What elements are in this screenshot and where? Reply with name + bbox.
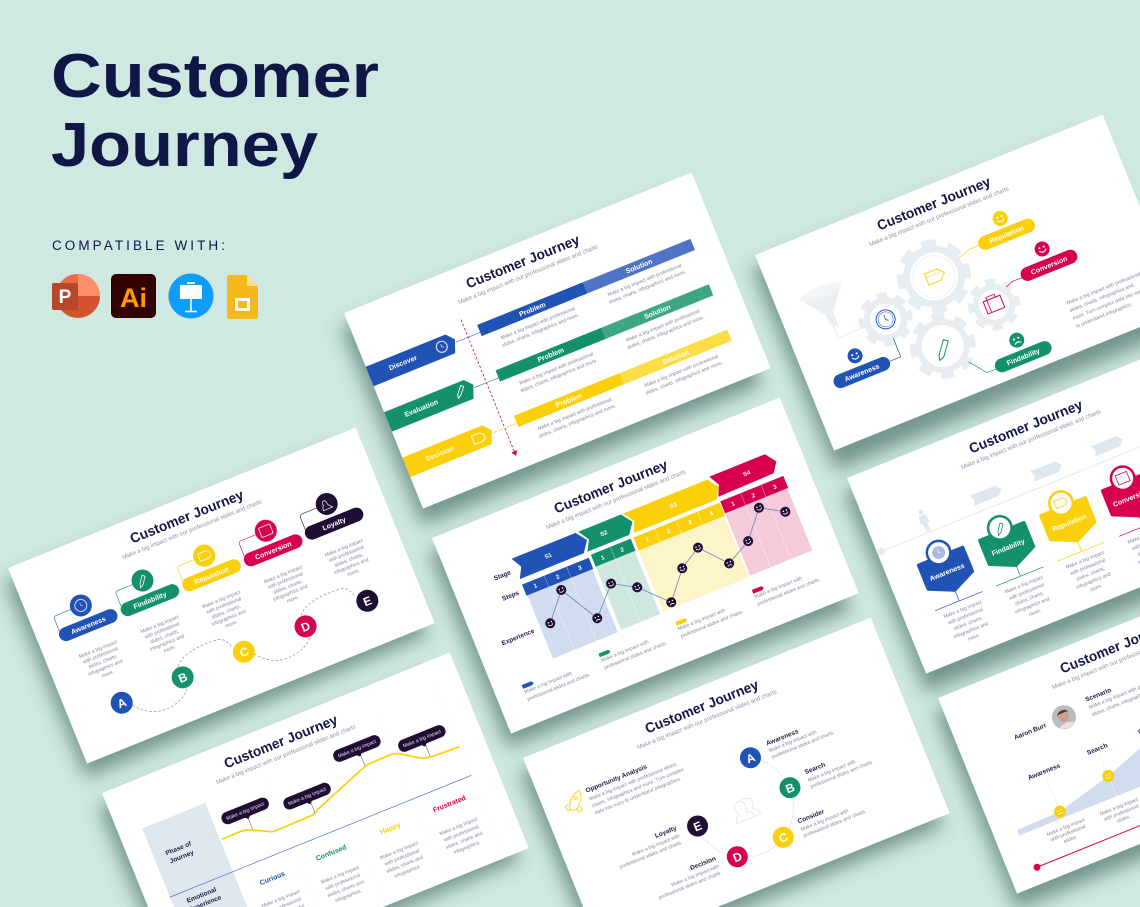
stage descriptions: slides. xyxy=(1063,834,1078,845)
column: Frustrated: Frustrated xyxy=(432,795,467,814)
stage labels and markers xyxy=(1027,719,1140,824)
panel: gears slide xyxy=(755,115,1140,451)
panel: emotional curve slide xyxy=(102,653,529,907)
slide heading: Customer Journey xyxy=(464,231,582,291)
node B: B xyxy=(783,780,797,796)
pill: Conversion xyxy=(1012,231,1079,283)
step: Loyalty: Loyalty xyxy=(322,517,347,532)
title: Customer xyxy=(51,42,379,111)
step: Awareness: Awareness xyxy=(70,616,107,636)
column: Frustrated xyxy=(430,794,488,858)
column: Confused: infographics. xyxy=(334,888,363,904)
step: Loyalty: slides, charts, xyxy=(334,552,364,569)
column: Frustrated: slides, charts and xyxy=(445,831,484,851)
step: Awareness: more. xyxy=(101,669,115,679)
node D: professional slides and charts. xyxy=(658,870,723,901)
stage S4: 1 xyxy=(731,501,737,508)
slide heading: Make a big impact with our professional slides and charts xyxy=(216,724,357,786)
pin: Findability: more. xyxy=(1028,608,1042,618)
legend: Make a big impact with xyxy=(600,639,650,664)
row: Decision: Problem xyxy=(555,392,584,409)
step: Loyalty: Make a big impact xyxy=(324,538,365,559)
step: Awareness xyxy=(48,584,138,689)
column: Curious: Curious xyxy=(259,871,286,887)
row: Discover: slides, charts, infographics and more. xyxy=(608,269,687,306)
icon: Illustrator xyxy=(111,274,156,318)
stage S1 xyxy=(512,530,598,596)
persona name: Aaron Burr xyxy=(1013,722,1048,742)
line chart: experience xyxy=(533,493,807,654)
pill: Reputation xyxy=(970,200,1037,252)
column: Confused: with professional xyxy=(325,872,361,892)
node D xyxy=(652,843,752,901)
title: Journey xyxy=(51,111,319,180)
row: Discover: Make a big impact with professional xyxy=(500,306,576,341)
title xyxy=(51,42,379,180)
row: Evaluation xyxy=(384,281,721,445)
column: Confused: slides, charts and xyxy=(327,879,365,899)
dashed journey path xyxy=(121,584,368,720)
pill: Awareness: Awareness xyxy=(844,363,881,384)
pin: Awareness: Make a big impact xyxy=(943,599,983,620)
pin: Reputation: Reputation xyxy=(1051,513,1088,533)
step: Conversion: with professional xyxy=(267,571,304,591)
step: Reputation: infographics and xyxy=(211,608,247,628)
slide heading: Customer Journey xyxy=(875,173,993,233)
row labels: Stage xyxy=(493,569,512,582)
step: Awareness: with professional xyxy=(82,646,119,665)
row: Discover xyxy=(366,236,702,399)
stage S3: 3 xyxy=(688,520,694,527)
pin: Awareness: with professional xyxy=(947,607,984,626)
pin: Findability xyxy=(972,506,1060,625)
stage descriptions: with professional xyxy=(1103,803,1140,823)
node A: Awareness xyxy=(765,728,800,747)
milestones A to E: B xyxy=(176,670,190,686)
step: Awareness: Make a big impact xyxy=(78,639,119,660)
step: Findability xyxy=(109,559,200,664)
pill: Reputation: Reputation xyxy=(989,225,1025,245)
step: Loyalty: infographics and xyxy=(333,557,370,576)
node B: Make a big impact with xyxy=(807,759,857,784)
stage labels and markers: Search xyxy=(1086,742,1109,757)
opportunity analysis: Make a big impact with professional slides, xyxy=(588,761,678,802)
stage S1: 1 xyxy=(533,583,539,590)
panel: circular stages slide xyxy=(523,618,950,907)
row: Evaluation: Solution xyxy=(643,304,672,321)
stage S4: 2 xyxy=(751,493,757,500)
row: Evaluation: Problem xyxy=(537,347,565,364)
legend: professional slides and charts. xyxy=(757,577,821,608)
step: Reputation: Make a big impact xyxy=(202,589,242,610)
label column: Journey xyxy=(169,849,195,865)
stage descriptions: with professional xyxy=(1050,824,1087,843)
pin: Awareness: infographics and xyxy=(953,621,990,640)
ring xyxy=(681,748,809,872)
area chart xyxy=(990,632,1140,836)
stage S1: 2 xyxy=(555,574,561,581)
stage S2: 2 xyxy=(620,547,626,554)
step: Findability: slides, charts, xyxy=(149,628,180,646)
stage S3: 4 xyxy=(709,511,715,518)
step: Reputation xyxy=(171,534,261,639)
road line xyxy=(876,409,1140,557)
pin: Reputation: Make a big impact xyxy=(1065,550,1106,571)
slide heading: Customer Journey xyxy=(643,676,761,736)
node B xyxy=(776,744,874,801)
node E: E xyxy=(691,818,704,834)
step: Awareness: slides, charts, xyxy=(88,653,118,670)
scenario: Scenario xyxy=(1084,687,1112,704)
row: Discover: Discover xyxy=(388,355,419,372)
row: Decision: slides, charts, infographics and more. xyxy=(538,403,617,440)
icon: rocket xyxy=(562,790,587,816)
legend: Make a big impact with xyxy=(677,608,727,632)
node E: Loyalty xyxy=(654,825,678,840)
icon: Illustrator: Ai xyxy=(120,283,147,313)
step: Findability: Findability xyxy=(133,591,168,611)
milestones A to E xyxy=(106,586,383,717)
pin: Findability: Make a big impact xyxy=(1004,574,1044,595)
node D: Decision xyxy=(689,855,717,872)
row: Discover: Make a big impact with professional xyxy=(607,263,683,298)
row: Decision: Solution xyxy=(662,349,690,366)
column: Happy: with professional xyxy=(384,848,421,868)
stage labels and markers: Awareness xyxy=(1027,762,1062,782)
text block: slides, charts, infographics and xyxy=(1069,283,1135,314)
opportunity analysis xyxy=(585,751,688,816)
pin: Reputation: slides, charts, xyxy=(1075,566,1106,583)
milestones A to E: C xyxy=(237,644,251,660)
gear: pencil xyxy=(904,308,981,384)
stage S2 xyxy=(578,512,643,568)
scenario xyxy=(1084,666,1140,718)
column: Frustrated: Make a big impact xyxy=(439,816,479,837)
pin: Findability: Findability xyxy=(991,538,1026,558)
node C xyxy=(769,794,868,851)
row: Discover: Problem xyxy=(518,302,547,319)
step: Conversion: slides, charts, xyxy=(273,579,303,596)
row: Evaluation: slides, charts, infographics and more. xyxy=(626,315,705,351)
step: Conversion: infographics and xyxy=(272,584,309,603)
row: Evaluation: Make a big impact with professional xyxy=(519,351,594,387)
step: Conversion: Make a big impact xyxy=(263,564,304,585)
step: Reputation: Reputation xyxy=(194,566,230,586)
slide heading: Customer Journey xyxy=(967,396,1085,456)
column: Confused: Make a big impact xyxy=(320,865,361,886)
step: Reputation: more. xyxy=(224,619,238,630)
pin: Awareness: more. xyxy=(967,632,981,643)
opportunity analysis: Opportunity Analysis xyxy=(585,763,648,795)
step: Conversion: Conversion xyxy=(254,541,293,562)
text block: Make a big impact with professional xyxy=(1066,271,1140,306)
legend: professional slides and charts. xyxy=(603,640,668,671)
node E: Make a big impact with xyxy=(631,833,681,858)
label column: Emotional xyxy=(186,886,218,905)
column: Confused xyxy=(311,842,369,907)
connector lines xyxy=(862,235,1050,405)
slide heading: Make a big impact with our professional slides and charts xyxy=(546,469,687,531)
icon: Keynote xyxy=(168,274,214,318)
pill: Findability: Findability xyxy=(1006,348,1041,367)
persona photo xyxy=(1048,702,1080,733)
row: Decision: Decision xyxy=(425,446,455,463)
slide heading: Customer Journey xyxy=(552,456,670,516)
slide heading: Make a big impact with our professional slides and charts xyxy=(869,186,1010,248)
column: Happy: Happy xyxy=(379,822,402,836)
row: Evaluation: slides, charts, infographics and more. xyxy=(520,358,599,394)
row: Evaluation: Make a big impact with professional xyxy=(625,308,701,344)
pin: Awareness: Awareness xyxy=(929,563,966,583)
light arrows xyxy=(969,434,1125,506)
node A: professional slides and charts. xyxy=(771,730,836,760)
stage descriptions xyxy=(1046,796,1140,851)
stage S3: S3 xyxy=(669,502,679,510)
legend xyxy=(521,565,822,703)
legend: professional slides and charts. xyxy=(527,672,591,703)
slide heading: Make a big impact with our professional slides and charts xyxy=(961,409,1102,471)
step: Conversion: more. xyxy=(286,594,300,605)
step: Loyalty: more. xyxy=(347,568,361,578)
node E xyxy=(612,812,712,870)
node C: professional slides and charts. xyxy=(803,809,867,839)
callouts: Make a big impact xyxy=(337,739,378,760)
legend: Make a big impact with xyxy=(754,576,803,600)
slide heading: Customer Journey xyxy=(222,711,340,771)
step: Loyalty xyxy=(293,482,384,587)
node D: Make a big impact with xyxy=(671,864,720,888)
row: Decision xyxy=(402,327,739,490)
icon: people xyxy=(730,795,761,824)
stage S1: S1 xyxy=(544,552,554,561)
label column xyxy=(142,803,266,907)
row: Evaluation: Evaluation xyxy=(404,399,439,419)
pin: Awareness: slides, charts, xyxy=(953,615,984,632)
yellow curve xyxy=(216,729,463,851)
stage S4: S4 xyxy=(743,470,752,478)
opportunity analysis: data into easy to understand infographics. xyxy=(594,776,682,816)
pin: Reputation: with professional xyxy=(1070,557,1106,577)
opportunity analysis: charts, infographics and more. Turn complex xyxy=(591,767,685,809)
row labels: Experience xyxy=(501,628,536,647)
legend: professional slides and charts. xyxy=(680,609,745,640)
stage S4: 3 xyxy=(773,484,778,491)
callouts: Make a big impact xyxy=(225,801,266,822)
milestones A to E: E xyxy=(361,593,374,609)
stage columns xyxy=(527,488,813,658)
panel: scenario slide xyxy=(938,558,1140,894)
step: Findability: with professional xyxy=(144,621,181,641)
node C: Make a big impact with xyxy=(800,808,850,833)
milestones A to E: A xyxy=(115,695,129,711)
slide heading: Make a big impact with our professional slides and charts xyxy=(637,689,778,751)
row: Decision: Make a big impact with professional xyxy=(644,354,719,389)
row labels: Steps xyxy=(501,590,521,603)
node A: Make a big impact with xyxy=(768,729,818,754)
gear: briefcase xyxy=(964,275,1024,335)
step: Findability: Make a big impact xyxy=(140,614,180,635)
icon: funnel xyxy=(798,277,862,346)
stage S3: 2 xyxy=(666,528,672,535)
panel: timeline slide xyxy=(8,428,435,764)
arrow: dashed timeline xyxy=(458,319,519,457)
column: Frustrated: with professional xyxy=(443,824,480,844)
compatible with label: COMPATIBLE WITH: xyxy=(52,238,225,253)
panel: pins slide xyxy=(847,338,1140,674)
row: Discover: Solution xyxy=(625,259,654,276)
pin: Awareness xyxy=(911,531,998,650)
stage descriptions: Make a big impact xyxy=(1099,797,1140,818)
node A xyxy=(737,715,836,772)
step: Conversion xyxy=(232,509,323,614)
row: Discover: slides, charts, infographics and more. xyxy=(501,312,580,349)
slide heading: Make a big impact with our professional slides and charts xyxy=(122,499,263,561)
node B: Search xyxy=(804,762,827,776)
row: Decision: slides, charts, infographics and more. xyxy=(645,360,724,397)
column: Happy xyxy=(370,818,428,882)
icon: PowerPoint: P xyxy=(59,287,72,308)
panel: problem and solution slide xyxy=(344,173,771,509)
divider line xyxy=(170,775,471,897)
callouts: Make a big impact xyxy=(287,786,328,807)
step: Loyalty: with professional xyxy=(328,544,365,564)
row labels xyxy=(477,569,536,647)
icon: person xyxy=(916,508,933,533)
column: Happy: Make a big impact xyxy=(379,840,420,861)
stage S2: S2 xyxy=(600,530,609,538)
stage S2: 1 xyxy=(600,555,606,562)
stage descriptions: slides. xyxy=(1116,814,1132,825)
callouts: Make a big impact xyxy=(402,729,443,750)
step: Reputation: slides, charts, xyxy=(211,604,242,621)
milestones A to E: D xyxy=(299,619,313,635)
slide heading: Customer Journey xyxy=(128,486,246,546)
step: Findability: infographics and xyxy=(149,633,186,653)
node A: A xyxy=(744,750,758,766)
pill: Awareness xyxy=(824,338,892,390)
pin: Reputation: more. xyxy=(1089,583,1103,593)
pin: Reputation: infographics and xyxy=(1075,571,1112,591)
gear: clock xyxy=(854,288,917,351)
pin: Conversion xyxy=(1095,456,1140,576)
node B: professional slides and charts. xyxy=(810,759,874,790)
node C: Consider xyxy=(797,808,826,825)
row: Decision: Make a big impact with professional xyxy=(537,397,613,432)
pin: Findability: infographics and xyxy=(1014,596,1051,616)
column: Curious xyxy=(252,868,310,907)
column: Happy: slides, charts and xyxy=(386,855,424,875)
pin: Findability: slides, charts, xyxy=(1014,590,1045,607)
icon: Google Slides xyxy=(227,275,258,319)
step: Reputation: with professional xyxy=(206,596,242,616)
step: Awareness: infographics and xyxy=(87,658,124,678)
red progress line xyxy=(1032,734,1140,872)
panel: stages and experience slide xyxy=(432,398,859,734)
callouts xyxy=(214,709,456,847)
node D: D xyxy=(731,849,744,865)
column: Confused: Confused xyxy=(315,844,348,863)
pill: Conversion: Conversion xyxy=(1030,256,1069,277)
stage descriptions: Make a big impact xyxy=(1046,817,1086,838)
node E: professional slides and charts. xyxy=(619,840,683,870)
node C: C xyxy=(777,830,790,846)
stage S1: 3 xyxy=(578,565,584,572)
icon: PowerPoint xyxy=(52,274,100,318)
column: Frustrated: infographics. xyxy=(453,840,481,856)
stage S3 xyxy=(623,477,730,551)
slide heading: Make a big impact with our professional slides and charts xyxy=(458,244,599,306)
step: Findability: more. xyxy=(163,644,177,655)
text block: to understand infographics. xyxy=(1075,301,1133,330)
stage S3: 1 xyxy=(645,537,651,544)
label column: Phase of xyxy=(165,840,193,857)
gear: tag xyxy=(890,233,978,320)
pin: Reputation xyxy=(1033,481,1121,601)
legend: Make a big impact with xyxy=(524,671,573,695)
column: Happy: infographics. xyxy=(393,864,422,880)
stage S4 xyxy=(709,451,788,514)
pill: Findability xyxy=(986,322,1054,374)
pin: Findability: with professional xyxy=(1008,582,1045,602)
